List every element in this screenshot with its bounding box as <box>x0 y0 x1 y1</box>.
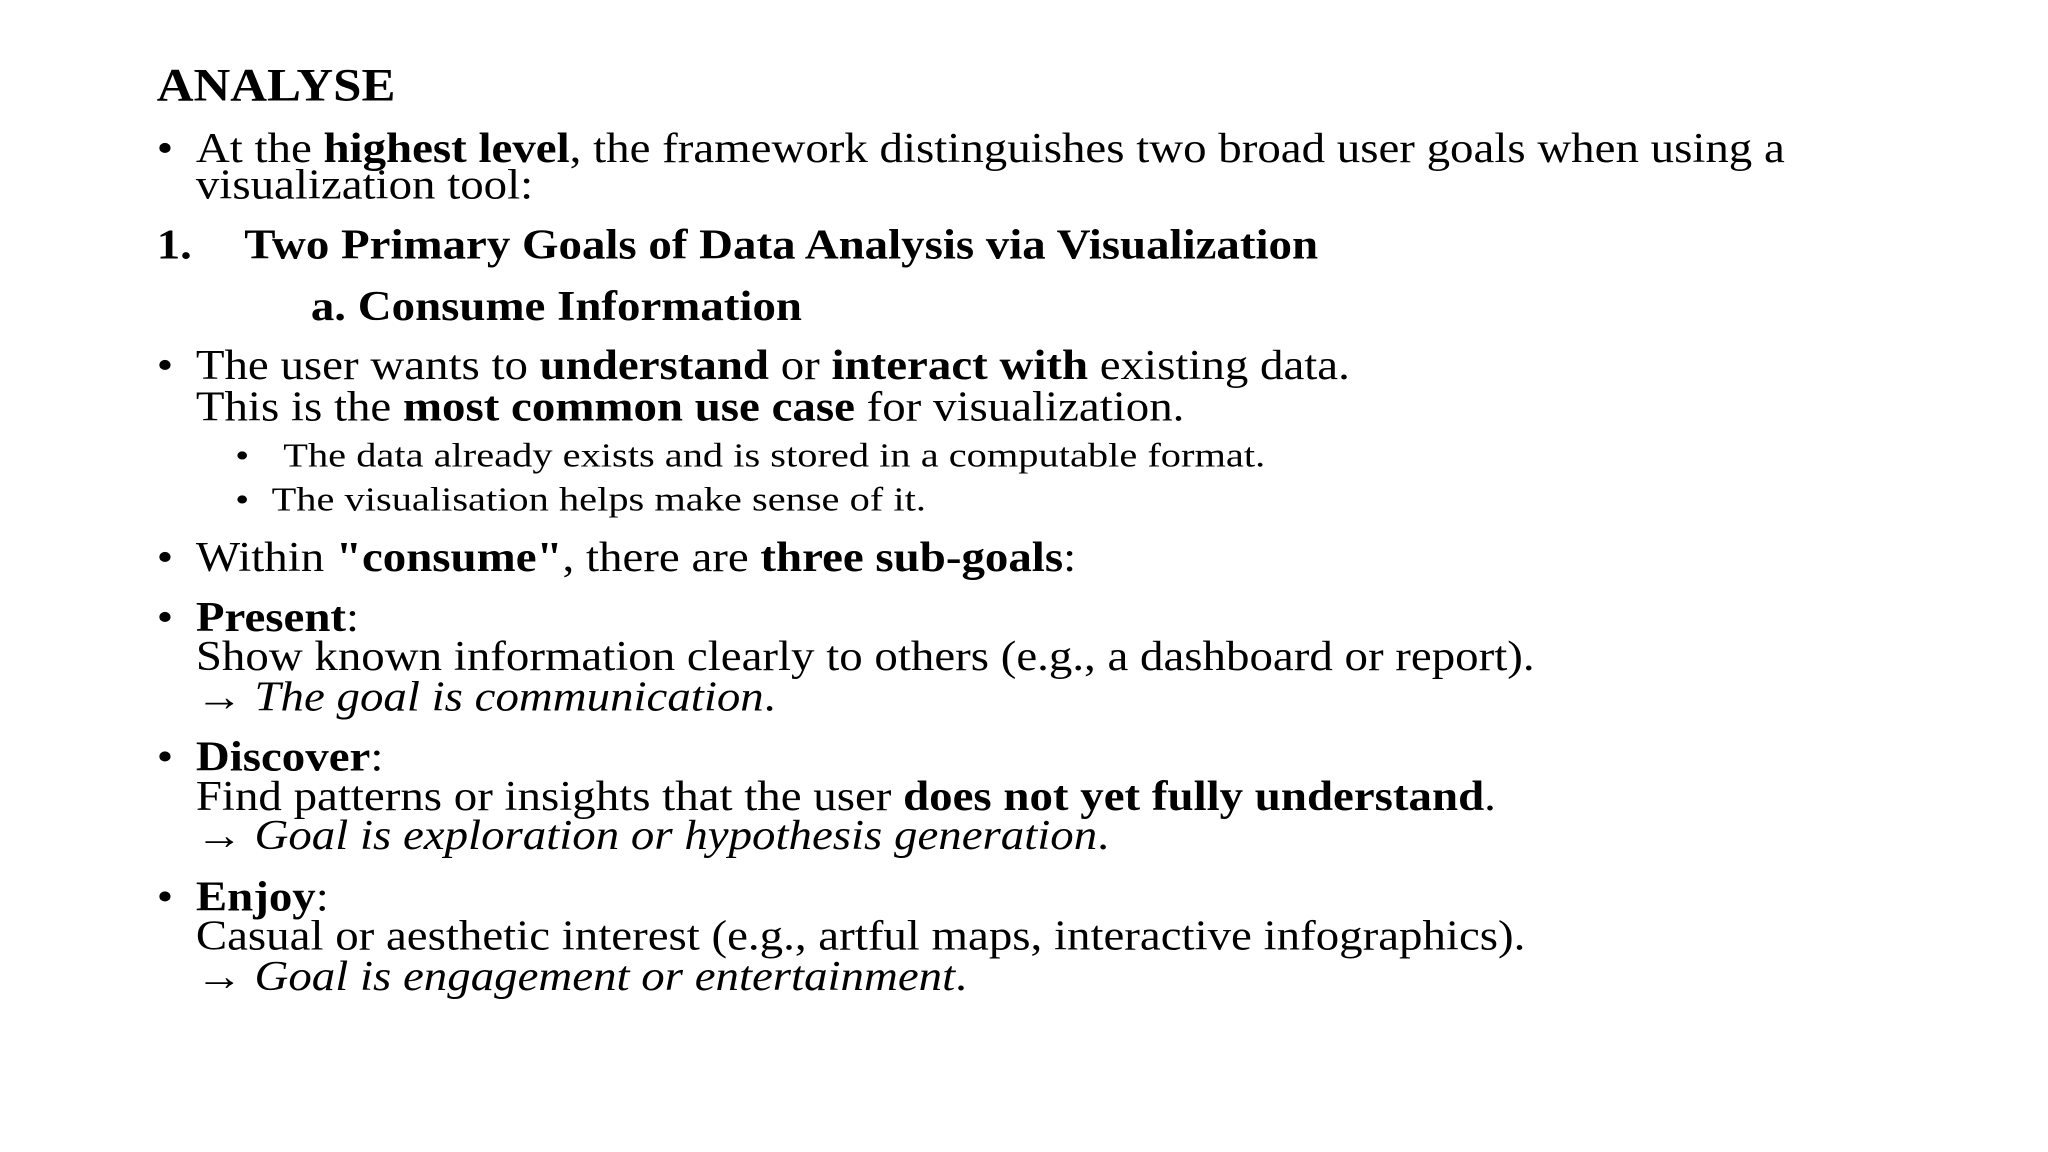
text block: present: Show known information clearly to others (e.g., a dashboard or report). <box>196 632 1535 679</box>
text block: consume description: The user wants to understand or interact with existing data. <box>196 341 1350 388</box>
text block: present <box>157 593 1535 720</box>
text block: discover: • <box>157 733 173 780</box>
text block: present: • <box>157 593 173 640</box>
text block: enjoy: • <box>157 872 173 920</box>
sub-bullets: • <box>235 481 249 519</box>
text block: consume description: • <box>157 341 173 388</box>
text block: intro bullet: • <box>157 124 173 171</box>
sub-bullets <box>235 436 1265 519</box>
text block: enjoy <box>157 872 1525 999</box>
text block: three sub-goals: Within "consume", there are three sub-goals: <box>196 533 1076 580</box>
text block: enjoy: Enjoy: <box>196 872 329 920</box>
title: ANALYSE <box>157 59 395 111</box>
text block: three sub-goals: • <box>157 533 173 580</box>
sub-bullets: • <box>235 436 249 474</box>
text block: enjoy: → Goal is engagement or entertainment. <box>196 952 967 999</box>
text block: present: → The goal is communication. <box>196 673 775 720</box>
text block: consume description: This is the most common use case for visualization. <box>196 383 1184 430</box>
text block: consume description <box>157 341 1350 430</box>
text block: intro bullet: At the highest level, the framework distinguishes two broad user goals when using a <box>196 124 1785 171</box>
text block: discover: Discover: <box>196 733 383 780</box>
subheading: consume information: a. Consume Information <box>311 282 802 329</box>
text block: discover <box>157 733 1496 858</box>
text block: discover: → Goal is exploration or hypothesis generation. <box>196 811 1109 858</box>
text block: intro bullet: visualization tool: <box>196 161 533 208</box>
text block: enjoy: Casual or aesthetic interest (e.g., artful maps, interactive infographics). <box>196 912 1525 959</box>
text block: present: Present: <box>196 593 359 640</box>
text block: discover: Find patterns or insights that the user does not yet fully understand. <box>196 772 1496 819</box>
heading: two primary goals: Two Primary Goals of Data Analysis via Visualization <box>244 221 1318 268</box>
text block: intro bullet <box>157 124 1785 208</box>
sub-bullets: The data already exists and is stored in a computable format. <box>283 436 1265 474</box>
sub-bullets: The visualisation helps make sense of it. <box>272 481 926 519</box>
heading: two primary goals: 1. <box>157 221 192 268</box>
